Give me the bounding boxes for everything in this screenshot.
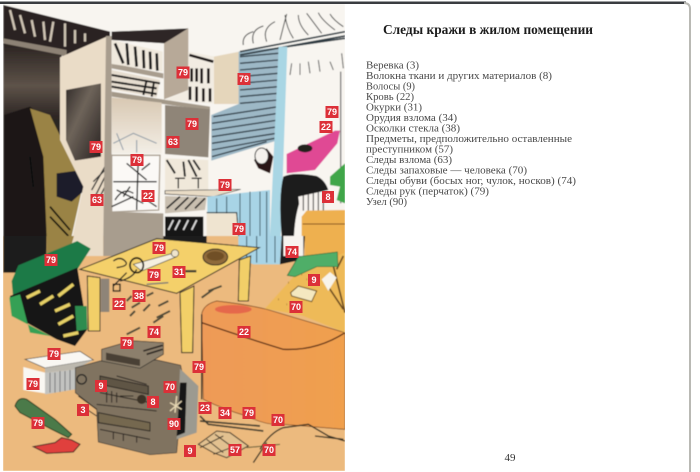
legend list: [366, 60, 576, 208]
marker 70: 70: [264, 445, 274, 455]
blue curtain: [207, 190, 270, 236]
dark mirror: [66, 83, 101, 161]
marker 79: 79: [234, 224, 244, 234]
marker 9: 9: [187, 446, 193, 456]
marker 74: [148, 326, 160, 338]
back shelves: [165, 52, 215, 103]
marker 38: [132, 290, 146, 302]
marker 3: 3: [80, 405, 86, 415]
marker 70: [290, 301, 302, 313]
lower cabinet with glasses: [165, 158, 241, 236]
marker 34: [218, 407, 232, 419]
marker 9: [308, 274, 320, 286]
window blinds: [211, 47, 279, 161]
legend list: Кровь (22): [366, 92, 414, 103]
marker 9: [95, 380, 107, 392]
bookcase side panel: [60, 37, 107, 236]
marker 79: 79: [132, 155, 142, 165]
legend list: Предметы, предположительно оставленные: [366, 134, 572, 145]
legend list: Следы рук (перчаток) (79): [366, 186, 489, 198]
marker 79: [152, 242, 166, 254]
broken glass door: [112, 155, 160, 212]
marker 8: 8: [325, 192, 331, 202]
legend list: Осколки стекла (38): [366, 124, 460, 134]
radiator: [298, 190, 343, 212]
marker 79: [48, 348, 60, 360]
bookcase frame: [103, 28, 210, 236]
marker 79: [238, 73, 250, 85]
legend list: Окурки (31): [366, 102, 422, 114]
marker 22: [320, 121, 332, 133]
legend list: Орудия взлома (34): [366, 113, 457, 124]
marker 79: [120, 337, 134, 349]
marker 79: 79: [33, 418, 43, 428]
marker 79: [90, 141, 102, 153]
marker 79: [32, 417, 44, 429]
marker 34: 34: [220, 408, 230, 418]
marker 8: [322, 191, 334, 203]
table legs: [87, 256, 251, 353]
legend list: Веревка (3): [366, 60, 419, 72]
burglar: [280, 131, 340, 236]
marker 22: 22: [239, 327, 249, 337]
marker 90: [168, 418, 180, 430]
marker 9: 9: [98, 381, 104, 391]
armchair: [202, 301, 345, 429]
table top: [80, 239, 259, 293]
lamp: [254, 148, 273, 173]
marker 79: 79: [239, 74, 249, 84]
marker 70: [164, 381, 176, 393]
marker 79: [192, 361, 206, 373]
marker 79: [326, 106, 338, 118]
marker 22: [112, 298, 126, 310]
coat: [4, 107, 85, 236]
marker 79: [218, 179, 232, 191]
marker 63: [166, 136, 180, 148]
marker 22: 22: [143, 191, 153, 201]
marker 79: 79: [49, 349, 59, 359]
page number: 49: [504, 452, 516, 464]
open door: [164, 28, 188, 99]
rope on floor: [198, 431, 280, 458]
legend list: преступником (57): [366, 144, 453, 156]
chair seat: [265, 252, 345, 333]
marker 79: [148, 269, 160, 281]
beige door: [214, 52, 239, 104]
stereo stack: [75, 360, 198, 455]
marker 79: 79: [122, 338, 132, 348]
marker 3: [77, 404, 89, 416]
ceiling fringe: [243, 13, 343, 45]
marker 63: 63: [168, 137, 178, 147]
marker 8: [147, 396, 159, 408]
lower room scene: [3, 236, 345, 463]
marker 8: 8: [150, 397, 156, 407]
bottle: [15, 398, 72, 438]
marker 57: 57: [230, 445, 240, 455]
upper bookshelves: [112, 40, 163, 97]
marker 79: [232, 223, 246, 235]
suitcase: [9, 241, 91, 346]
title: Следы кражи в жилом помещении: [383, 22, 593, 37]
curtain rod: [240, 32, 345, 55]
marker 22: 22: [114, 299, 124, 309]
upper room scene: [3, 5, 345, 236]
marker 79: 79: [194, 362, 204, 372]
legend list: Волокна ткани и других материалов (8): [366, 71, 552, 82]
marker 23: [198, 402, 212, 414]
cabinet glass panel: [112, 97, 162, 153]
marker 31: [172, 266, 186, 278]
marker 74: [286, 246, 298, 258]
marker 74: 74: [149, 327, 159, 337]
items on table: [113, 249, 228, 291]
marker 22: [238, 326, 250, 338]
marker 57: [228, 444, 242, 456]
marker 63: [90, 194, 104, 206]
window frame: [270, 47, 287, 236]
marker 90: 90: [169, 419, 179, 429]
marker 70: 70: [165, 382, 175, 392]
marker 79: 79: [187, 119, 197, 129]
legend list: Узел (90): [366, 197, 407, 208]
side hatch: [92, 167, 105, 200]
marker 79: 79: [28, 379, 38, 389]
legend list: Следы взлома (63): [366, 155, 452, 166]
marker 79: 79: [327, 107, 337, 117]
marker 70: [272, 414, 284, 426]
marker 79: [242, 407, 256, 419]
plant: [330, 163, 345, 203]
scarf on floor: [200, 416, 263, 431]
marker 70: 70: [291, 302, 301, 312]
marker 79: [130, 154, 144, 166]
blood stain: [33, 438, 80, 453]
legend list: Следы обуви (босых ног, чулок, носков) (74): [366, 176, 576, 187]
video player: [102, 341, 163, 368]
marker 38: 38: [134, 291, 144, 301]
marker 79: 79: [91, 142, 101, 152]
marker 79: 79: [178, 68, 188, 78]
carpet fold: [253, 424, 345, 463]
marker 79: 79: [154, 243, 164, 253]
marker 79: 79: [46, 255, 56, 265]
marker 9: 9: [311, 275, 317, 285]
marker 79: 79: [149, 270, 159, 280]
chair back: [302, 210, 345, 236]
marker 79: [186, 118, 198, 130]
wall and floor background: [3, 4, 345, 471]
bookcase base: [3, 236, 345, 273]
top left shelf: [3, 5, 110, 57]
legend list: Следы запаховые — человека (70): [366, 166, 527, 176]
illustration: burgled room: [3, 4, 345, 471]
marker 70: [262, 444, 276, 456]
marker 79: [26, 378, 40, 390]
marker 22: [142, 190, 154, 202]
marker 74: 74: [287, 247, 297, 257]
marker 79: 79: [220, 180, 230, 190]
glass shards and footprints: [127, 286, 222, 334]
marker 79: [44, 254, 58, 266]
marker 63: 63: [92, 195, 102, 205]
white box: [23, 351, 93, 394]
marker 22: 22: [321, 122, 331, 132]
marker 9: [184, 445, 196, 457]
marker 70: 70: [273, 415, 283, 425]
marker 79: 79: [244, 408, 254, 418]
marker 31: 31: [174, 267, 184, 277]
marker 23: 23: [200, 403, 210, 413]
marker 79: [176, 66, 190, 78]
markers: [26, 66, 338, 457]
wardrobe interior: [3, 43, 62, 236]
cabinet door: [165, 105, 210, 157]
legend list: Волосы (9): [366, 82, 415, 92]
